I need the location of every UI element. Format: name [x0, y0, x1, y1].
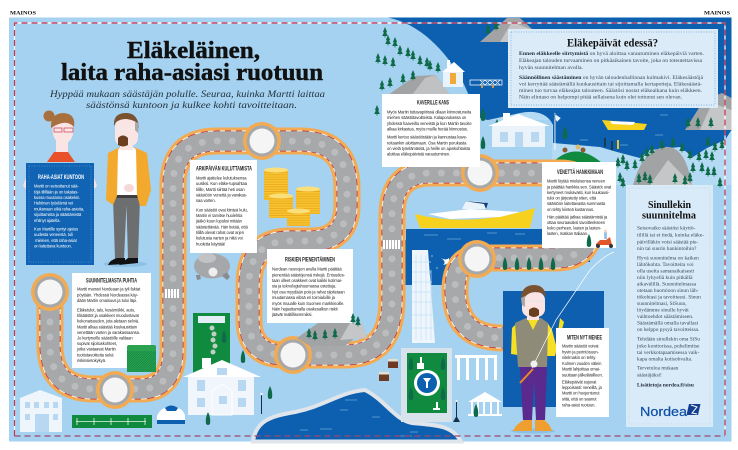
body text: on tehty kiinteä kustannus. [547, 207, 594, 212]
body text [195, 176, 249, 246]
panel: suunnitelmasta puhtia [72, 273, 151, 368]
panel: man backdrop [503, 291, 604, 407]
body text: Martti kertoo säästöistään ja kannustaa kave- [387, 134, 468, 140]
body text: mieleen, että raha-asiat [34, 238, 78, 243]
rock: right cliff [685, 93, 732, 130]
figure: Martti fishing [511, 252, 614, 434]
body text: Seisovatko säästösi käyttö- [637, 226, 696, 232]
body text: minen tuo turvaa eläkeajan talouteen. Säästösi nostat eläkeaikana kuin eläkkeen. [519, 88, 702, 94]
body text: Kun säästöt ovat kiinteä kulu, [196, 207, 248, 212]
heading [642, 200, 697, 222]
body text: ja päättää hankkia sen. Säästöt ovat [546, 184, 612, 189]
body text: hyvin ja perintösuun- [562, 349, 599, 354]
body text: Martti on huojentunut [562, 391, 600, 396]
body text: on laitettava kuntoon. [34, 244, 72, 249]
icon: blue car [157, 406, 185, 424]
body text: suuttaan jälkeläisilleen. [562, 372, 603, 377]
subtitle: säästönsä kuntoon ja kulkee kohti tavoitteitaan. [86, 100, 297, 111]
body text: venettään varten ja varakassaansa. [77, 330, 140, 335]
body text: olla useita samanaikaisesti [637, 268, 695, 274]
body text: raha-asiat ruotuun. [562, 402, 595, 407]
body text: alkaa kirkastua, myös muille herää kiinnostus. [387, 127, 468, 132]
body text [546, 178, 612, 236]
body text: ehtinyt ajatella. [34, 218, 60, 223]
body text: Tervetuloa mukaan [637, 366, 679, 372]
body text: Lisätietoja nordea.fi/sisu [637, 382, 694, 388]
heading: RISKIEN PIENENTÄMINEN [285, 256, 335, 264]
body text: Säännöllinen säästäminen on hyvän taloudenhallinnan kulmakivi. Eläkesäästöjä [519, 75, 704, 81]
water: top right sea [388, 18, 732, 158]
trees: northern forest [374, 27, 725, 188]
heading: RAHA-ASIAT KUNTOON [38, 174, 84, 181]
body text: yhdessä haaveiltu veneistä ja kun Martin tavoite [387, 121, 472, 126]
body text: otetaan huomioon sinun läh- [637, 288, 699, 294]
body text: pienentää säästöjensä riskejä. Entuudes- [272, 272, 346, 277]
body text: aloittaa eläkepäivistä varautuminen. [387, 152, 450, 156]
body text: Säästämällä omalla tavallasi [637, 320, 699, 326]
body text: Nyt osa myydään pois ja rahat sijoitetaan [272, 289, 345, 294]
body text: koko perheen, lasten ja lasten- [547, 226, 602, 230]
icon: big white house [183, 358, 261, 415]
icon: yellow motor boat [415, 201, 535, 228]
road: crosswalks [165, 240, 400, 298]
body text: Martti ajattelee kulutuksensa [196, 176, 247, 180]
icon: fountain park [401, 348, 452, 422]
rock: hill by cabin [388, 75, 450, 95]
rock: large hill [633, 147, 692, 185]
body text: ottaa seuraavaksi tavoitteekseen [547, 220, 606, 225]
trees: cypress row [503, 257, 555, 270]
body text: miehen säästötavoitteista. Kalaporukassa on [387, 115, 467, 120]
body text: tilille, Martti siirtää heti osan [196, 187, 245, 192]
body text: kokonaisuuden, jota aletaan selviä. [77, 319, 139, 324]
body text: jääkö kuun lopuksi mitään [195, 219, 243, 224]
body text: tilillä olevat rahat ovat arjen [196, 230, 245, 235]
waves [300, 60, 668, 436]
body text: Eläketulot, talo, kesämökki, auto, [77, 308, 135, 312]
body text: löydämme sinulle hyvät [637, 308, 689, 314]
landscape: top right land [372, 18, 732, 185]
icon: moon and stars [431, 255, 449, 269]
icon: green fence strip [72, 415, 152, 428]
icon: anglers on shore [604, 138, 619, 150]
panel: venettä hankkimaan [542, 162, 616, 248]
panel: raha-asiat kuntoon [26, 163, 94, 265]
icon: greek temple [468, 392, 502, 416]
body text: aikavälillä. Suunnitelmassa [637, 282, 697, 288]
body text: riskinsietokykyä. [77, 358, 106, 363]
trees and lamp by house [206, 350, 272, 425]
body text [387, 109, 472, 156]
body text [519, 51, 704, 100]
label: mainos left: MAINOS [10, 12, 36, 16]
rock: top hill [480, 18, 533, 42]
icon: log cabin [442, 60, 465, 87]
body text: Näin elintaso on helpompi pitää sellaisena kuin olet tottunut sen olevan. [519, 94, 682, 100]
icon: bundle of bills [127, 345, 156, 372]
heading: ARKIPÄIVÄN KULUTTAMISTA [196, 164, 252, 172]
body text [76, 286, 141, 363]
icon: gold coin stacks [264, 168, 320, 226]
body text: hyvän suunnitelman avulla. [519, 65, 583, 71]
heading: suunnitelma [642, 210, 697, 222]
body text: Martti lahjoittaa omai- [562, 367, 601, 372]
body text: dään Martin omaisuus ja tuloi läpi. [77, 298, 137, 303]
title [61, 37, 323, 86]
body text: Kun Martille syntyi ajatus [34, 226, 78, 232]
body text: nin tai suurin hankintoihin? [637, 246, 697, 252]
body text: Myös Martin tuttavapiirissä ollaan kiinnostuneita [387, 109, 472, 114]
body text: tilisäästöt ja osakkeet muodostavat [77, 313, 140, 318]
body text: on helppo pysyä tavoitteissa. [637, 327, 699, 333]
water: lake [253, 390, 461, 442]
body text: tai verkkotapaamisessa vaik- [637, 350, 699, 356]
body text: sijoittamista ja säästämistä [34, 212, 82, 217]
road: game path [50, 141, 590, 389]
icon: old white building [20, 390, 62, 432]
body text: Näin hajauttamalla osakesalkun riskit [272, 306, 338, 312]
body text: taan olleet osakkeet ovat kaikki kotimai- [272, 278, 343, 283]
body text: säästöön laitettavasta summasta [547, 201, 606, 206]
logo: nordea [640, 404, 700, 419]
body text: Kolmen vuoden välein [562, 361, 602, 366]
icon: italian arcade [455, 355, 497, 380]
heading: VENETTÄ HANKKIMAAN [557, 168, 603, 176]
icon: piggy bank [194, 253, 230, 280]
logo: nordea: Nordea [640, 405, 687, 419]
body text: töjä tilillään ja on takatas- [34, 189, 79, 194]
icon: white summer house [488, 113, 550, 147]
body text: Martti löytää mieluisensa veneen [547, 178, 606, 184]
body text [636, 226, 704, 388]
icon: bridge [470, 80, 502, 88]
body text: jäävät maltillisemmiksi. [271, 312, 312, 317]
rock and trees below risk panel [297, 313, 367, 346]
icon: leaning tower [412, 250, 435, 343]
heading: Sinullekin [648, 200, 691, 211]
body text: myös muualle kuin Suomen markkinoille. [272, 301, 344, 306]
body text: Eläkeajan talouden turvaaminen on pitkäaikainen tavoite, joka on toteutettavissa [519, 58, 703, 64]
figure: woman behind panel [23, 110, 97, 190]
body text: tilillä tai et tiedä, kuinka eläke- [637, 232, 704, 238]
body text: suunnitelmasi, SiSuun, [637, 301, 687, 307]
panel: riskien pienentäminen [267, 249, 353, 323]
panel: arkipäivän kuluttamista [190, 160, 257, 253]
body text: mukanaan eikä raha-asioita, [34, 206, 84, 211]
icon: small market stalls [379, 359, 398, 381]
body text: kulutusta varten ja niitä voi [196, 236, 243, 241]
island: green hill [552, 144, 602, 163]
icon: green park with stone path [193, 313, 230, 373]
road: waypoint circles [31, 122, 499, 409]
icon: street lamp and tree [453, 400, 478, 422]
figure: Martti with orange jacket [103, 113, 151, 267]
body text: kapa omalta kotisohvalta. [637, 356, 692, 362]
body text: on vielä työelämässä, ja heille on ajankohtaista [387, 146, 471, 151]
body text: Ennen eläkkeelle siirtymistä on hyvä aloittaa varautuminen eläkepäiviä varten. [519, 51, 704, 57]
panel: eläkepäivät edessä [508, 29, 718, 108]
heading: SUUNNITELMASTA PUHTIA [86, 278, 137, 284]
body text: Hektinen työelämä vei [34, 201, 73, 206]
icon: distant yellow boat [602, 120, 647, 130]
icon: flag pole [554, 113, 561, 150]
body text: tuottotavoitteita sekä [77, 352, 114, 357]
body text: siitä, että on saanut [562, 396, 597, 401]
body text: voi kerryttää säästämällä kuukausittain tai sijoittamalla kertapotteja. Eläkesäästä- [519, 82, 702, 88]
body text: sia ja teknologiahuumassa ostettuja. [272, 284, 336, 289]
body text: sopivat sijoituskohteet, [77, 341, 117, 346]
heading: MITEN NYT MENEE [567, 334, 602, 342]
body text: jotka vastaavat Martin [76, 347, 117, 352]
body text: Hän päättää jatkaa säästämistä ja [547, 214, 608, 219]
body text: uudesta veneestä, tuli [34, 232, 73, 237]
body text: saa varten. [196, 198, 216, 203]
body text: kertyneet mukavasti, kun kuukausi- [547, 190, 610, 195]
subtitle: Hyppää mukaan säästäjän polulle. Seuraa, kuinka Martti laittaa [49, 89, 325, 100]
body text: Jo kertyneille säästöille valitaan [77, 336, 133, 340]
heading: KAVERILLE KANS [417, 100, 449, 106]
body text: säästettävää. Hän tietää, että [196, 224, 249, 229]
title: laita raha-asiasi ruotuun [61, 59, 323, 86]
body text: vaihtoehdot säästämiseen. [637, 314, 693, 320]
body text: nitelmakin on tehty. [562, 355, 596, 360]
body text: huoletta käyttää! [196, 241, 225, 246]
subtitle [49, 89, 325, 111]
body text: Hyvä suunnitelma on kaiken [637, 256, 699, 262]
body text: Martti marssii Nordeaan ja tyli faktat [77, 286, 141, 292]
heading: Eläkepäivät edessä? [567, 38, 658, 50]
body text: päivilläkin voisi säästää pie- [637, 240, 698, 246]
body text: Martin ei tarvitse huolehtia [196, 213, 243, 218]
body text: lasten, matkan Italiaan. [547, 231, 588, 236]
body text [271, 266, 346, 317]
body text [34, 184, 84, 249]
panel: miten nyt menee [556, 328, 609, 417]
body text: joko konttorissa, puhelimitse [636, 344, 700, 350]
body text: tökohtasi ja tavoitteesi. Sinun [637, 294, 701, 300]
body text: tuloi on järjestetty siten, että [547, 196, 597, 200]
water: boat bay [405, 229, 590, 285]
icon: scooter [596, 230, 613, 248]
body text: Martin säästöt voivat [562, 344, 599, 348]
body text: niin lyhyellä kuin pitkällä [637, 275, 693, 281]
body text: säästöön venettä ja varakas- [196, 192, 248, 198]
title: Eläkeläinen, [127, 37, 260, 64]
body text: uusiksi. Kun eläke-tupsahtaa [196, 181, 248, 186]
body text: Eläkepäivät sujuvat [562, 380, 597, 384]
body text: lähtökohta. Tavoitteita voi [637, 262, 694, 268]
panel: kaverille kans [382, 94, 480, 167]
body text: Nordean neuvojen avulla Martti päättää [272, 266, 342, 272]
body text: kussa muutama osakekin. [34, 195, 80, 200]
body text: leppoisasti: veneillä, ja [562, 385, 602, 390]
body text: säästäjäksi! [637, 372, 662, 378]
body text: muutamassa eibsä eri toimialoille ja [272, 295, 336, 300]
panel: sinullekin suunnitelma [626, 185, 713, 427]
body text: Martti on seisottanut sää- [34, 184, 79, 188]
body text: Tehdään sinullekin oma SiSu [637, 336, 700, 342]
body text: reitaankin aloittamaan. Osa Martin porukasta [387, 140, 467, 145]
label: mainos right: MAINOS [704, 12, 730, 16]
body text: pöytään. Yhdessä Nordeassa käy- [77, 292, 139, 298]
body text: Martti alkaa säästää kuukausittain [77, 324, 138, 329]
body text [562, 344, 603, 407]
